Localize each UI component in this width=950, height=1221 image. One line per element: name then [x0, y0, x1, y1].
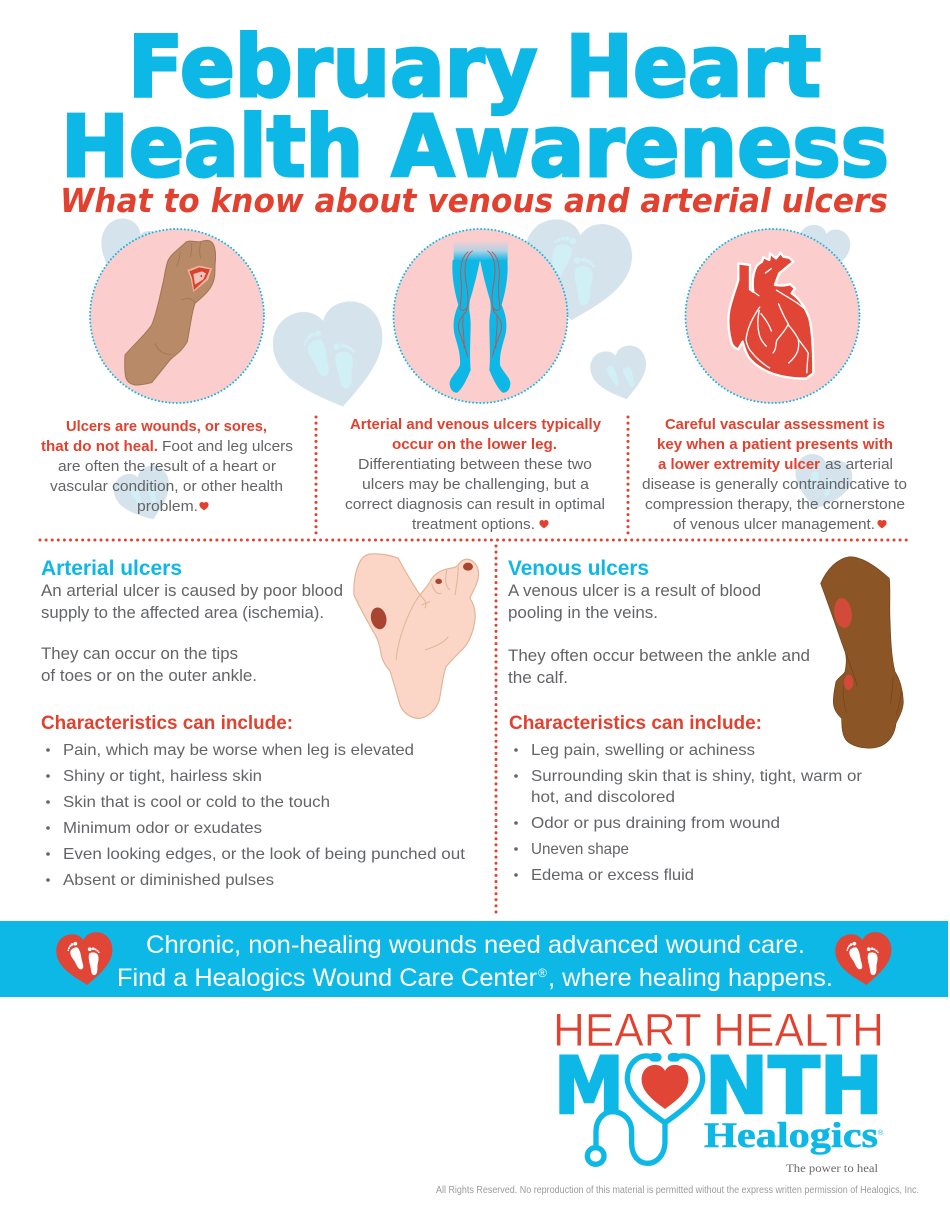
- text: arterial description: They can occur on the tips: [41, 644, 238, 663]
- decorative heart behind text column one: [109, 461, 180, 529]
- banner text: ®: [538, 966, 547, 980]
- heading: arterial ulcers: Arterial ulcers: [41, 557, 182, 580]
- list: venous characteristics: Odor or pus draining from wound: [531, 815, 780, 832]
- text block: where ulcers occur: Arterial and venous ulcers typically: [350, 416, 602, 433]
- text block: what ulcers are: that do not heal.: [41, 438, 158, 455]
- subtitle: What to know about venous and arterial ulcers: [60, 181, 888, 220]
- icon: red heart with feet right: [834, 931, 894, 987]
- text block: what ulcers are: problem.: [137, 498, 198, 515]
- icon: pale foot with ulcers: [354, 554, 479, 718]
- text block: vascular assessment: as arterial: [825, 456, 893, 473]
- text block: what ulcers are: vascular condition, or other health: [50, 478, 283, 495]
- text block: vascular assessment: of venous ulcer management.: [673, 516, 875, 533]
- banner text: Find a Healogics Wound Care Center: [117, 964, 537, 992]
- icon: legs with veins in circle: [394, 229, 568, 403]
- panel: venous ulcers: [508, 557, 903, 884]
- text: venous description: They often occur between the ankle and: [508, 646, 810, 665]
- banner text: [117, 931, 833, 992]
- text block: vascular assessment: compression therapy, the cornerstone: [645, 496, 905, 513]
- decorative heart behind circle three: [792, 222, 853, 280]
- title: [61, 18, 889, 197]
- panel: arterial ulcers: [41, 554, 479, 889]
- list: arterial characteristics: Minimum odor or exudates: [63, 820, 262, 837]
- list: venous characteristics: Surrounding skin that is shiny, tight, warm or: [531, 768, 863, 785]
- text block: where ulcers occur: occur on the lower leg.: [392, 436, 557, 453]
- text block: what ulcers are: are often the result of a heart or: [58, 458, 276, 475]
- list: arterial characteristics: [46, 742, 466, 889]
- list: arterial characteristics: Absent or diminished pulses: [63, 872, 274, 889]
- decorative heart with feet: behind circle two: [518, 216, 635, 326]
- list: venous characteristics: hot, and discolored: [531, 789, 675, 806]
- text: arterial description: supply to the affected area (ischemia).: [41, 603, 324, 622]
- text: arterial description: An arterial ulcer is caused by poor blood: [41, 581, 343, 600]
- logo letters: M and NTH: NTH: [705, 1042, 883, 1132]
- text block: what ulcers are: [41, 418, 293, 515]
- text block: what ulcers are: Foot and leg ulcers: [162, 438, 293, 455]
- list: venous characteristics: Edema or excess fluid: [531, 867, 694, 884]
- logo: Heart Health Month Healogics: ®: [878, 1129, 884, 1137]
- list: arterial characteristics: Even looking edges, or the look of being punched out: [63, 846, 466, 863]
- logo line: heart health: HEART HEALTH: [553, 1004, 884, 1056]
- decorative heart behind circle one: [86, 212, 175, 298]
- title: Health Awareness: [61, 98, 889, 197]
- heading: venous ulcers: Venous ulcers: [508, 557, 649, 580]
- banner text: , where healing happens.: [548, 964, 833, 992]
- text block: where ulcers occur: [345, 416, 605, 533]
- list: arterial characteristics: Shiny or tight, hairless skin: [63, 768, 262, 785]
- banner text: Chronic, non-healing wounds need advanced wound care.: [146, 931, 805, 959]
- icon: logo red heart: [642, 1065, 688, 1109]
- logo letters: M and NTH: M: [554, 1042, 624, 1132]
- text block: where ulcers occur: treatment options.: [412, 516, 535, 533]
- logo tagline: The power to heal: [786, 1161, 879, 1175]
- text: venous description: [508, 581, 810, 687]
- logo: Heart Health Month Healogics: [553, 1004, 884, 1175]
- icon: red heart with feet left: [55, 931, 115, 987]
- list: arterial characteristics: Skin that is cool or cold to the touch: [63, 794, 330, 811]
- text: venous description: A venous ulcer is a result of blood: [508, 581, 761, 600]
- list: venous characteristics: Leg pain, swelling or achiness: [531, 742, 755, 759]
- text block: vascular assessment: disease is generally contraindicative to: [642, 476, 907, 493]
- text: arterial description: of toes or on the outer ankle.: [41, 666, 257, 685]
- heading: venous characteristics: Characteristics can include:: [509, 713, 762, 734]
- text block: where ulcers occur: ulcers may be challenging, but a: [362, 476, 590, 493]
- decorative heart behind text column three: [788, 451, 856, 516]
- banner: call to action: [0, 921, 948, 997]
- logo letters: M and NTH: [554, 1042, 883, 1132]
- icon: dark leg with ulcers: [821, 557, 903, 748]
- text block: vascular assessment: key when a patient presents with: [657, 436, 893, 453]
- logo wordmark: Healogics: [704, 1115, 878, 1155]
- divider: column separators: [40, 417, 912, 918]
- text block: vascular assessment: a lower extremity ulcer: [658, 456, 820, 473]
- list: venous characteristics: [514, 742, 863, 884]
- text block: vascular assessment: [642, 416, 907, 533]
- text block: vascular assessment: Careful vascular assessment is: [665, 416, 885, 433]
- text block: where ulcers occur: correct diagnosis can result in optimal: [345, 496, 605, 513]
- list: arterial characteristics: Pain, which may be worse when leg is elevated: [63, 742, 414, 759]
- icon: foot with ulcer in circle: [90, 229, 264, 403]
- icon: anatomical heart in circle: [686, 229, 860, 403]
- text: venous description: the calf.: [508, 668, 568, 687]
- text: arterial description: [41, 581, 343, 685]
- text: venous description: pooling in the veins.: [508, 603, 658, 622]
- heading: arterial characteristics: Characteristics can include:: [41, 713, 293, 734]
- list: venous characteristics: Uneven shape: [531, 841, 629, 858]
- decorative heart with feet: large, centre: [266, 295, 397, 419]
- text block: where ulcers occur: Differentiating between these two: [358, 456, 592, 473]
- decorative heart with feet: small: [587, 342, 654, 406]
- text block: what ulcers are: Ulcers are wounds, or sores,: [66, 418, 267, 435]
- title: February Heart: [128, 18, 821, 117]
- icon: stethoscope heart: [587, 1044, 704, 1164]
